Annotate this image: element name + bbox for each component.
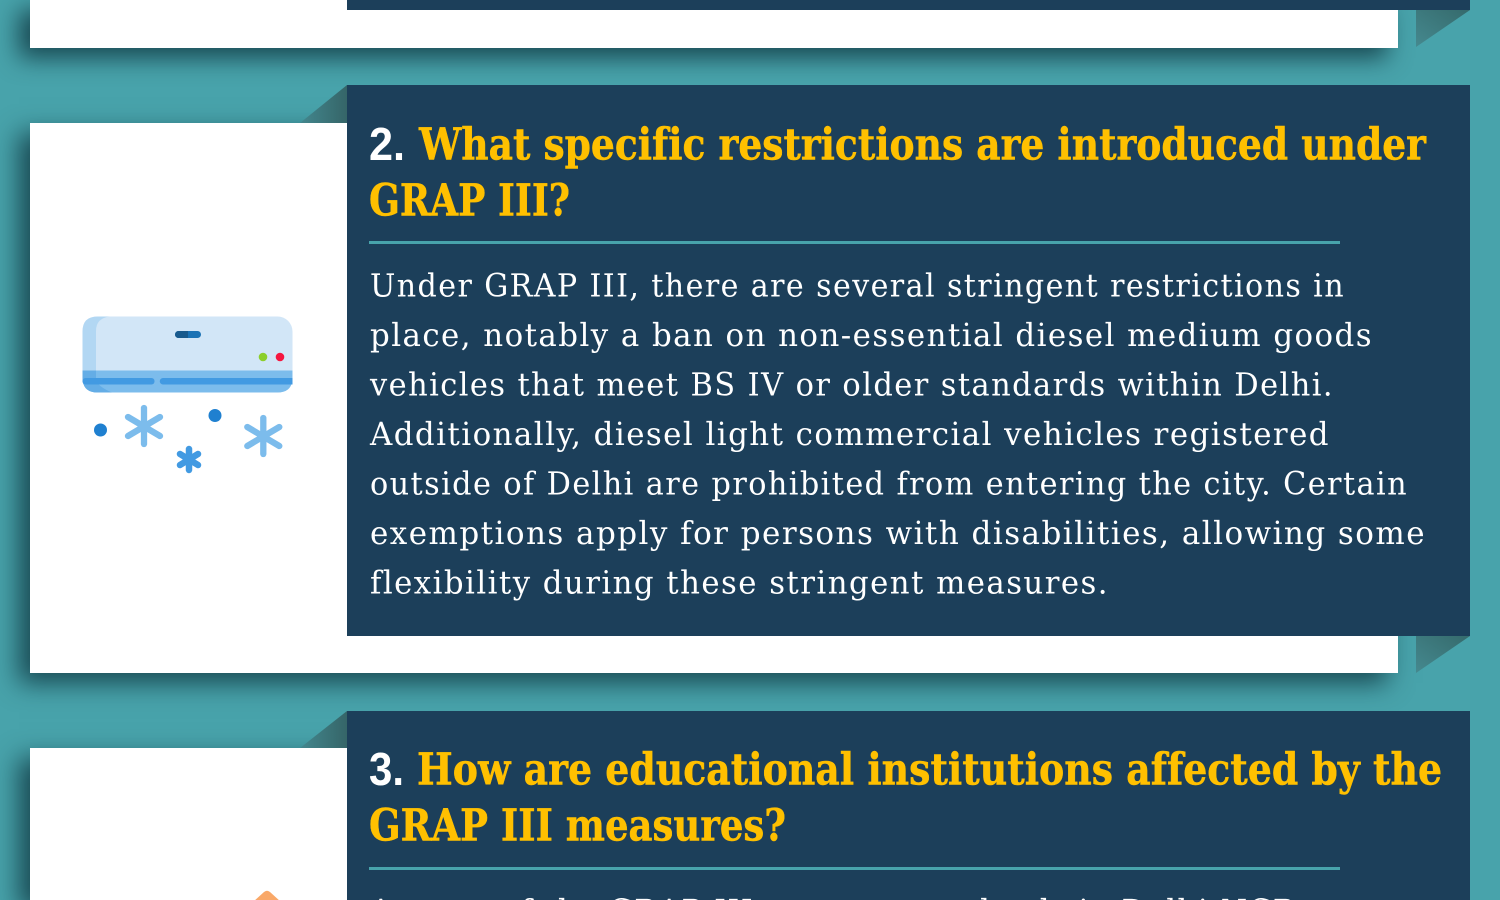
- icon: school roof tip: [255, 890, 279, 900]
- snowflake right: [247, 418, 279, 454]
- question number: 3.: [369, 743, 404, 795]
- text block: answer 2: Additionally, diesel light commercial vehicles registered: [369, 415, 1330, 453]
- white card base: [30, 748, 1398, 900]
- text block: answer 2: [369, 266, 1426, 602]
- white card base: [30, 123, 1398, 673]
- left folded corner: [300, 711, 347, 748]
- right folded corner: [1416, 10, 1470, 47]
- navy answer panel: [347, 711, 1470, 900]
- text block: answer 2: flexibility during these stringent measures.: [370, 564, 1109, 602]
- panel: question 1 card (cropped): [3, 0, 1470, 74]
- text block: answer 2: place, notably a ban on non-essential diesel medium goods: [370, 316, 1373, 354]
- panel: question 2 card: [2, 85, 1470, 700]
- question number: 2.: [369, 118, 405, 170]
- heading: question 3: [369, 743, 1442, 852]
- snow dots: [94, 409, 222, 436]
- text block: answer 2: Under GRAP III, there are several stringent restrictions in: [370, 266, 1345, 304]
- text block: answer 2: vehicles that meet BS IV or older standards within Delhi.: [369, 366, 1334, 404]
- AC unit body: [82, 316, 292, 392]
- divider: question 3: [369, 867, 1340, 870]
- question text line 2: GRAP III measures?: [369, 800, 786, 852]
- question text line 2: GRAP III?: [369, 176, 570, 226]
- navy answer panel: [347, 85, 1470, 636]
- text block: answer 2: exemptions apply for persons with disabilities, allowing some: [370, 514, 1426, 552]
- right folded corner: [1416, 636, 1470, 673]
- heading: question 2: [369, 118, 1427, 226]
- snowflake bottom: [180, 449, 198, 470]
- navy answer panel: [347, 0, 1470, 10]
- divider: question 2: [369, 241, 1340, 244]
- snowflake left: [128, 408, 160, 444]
- icon: air conditioner with snowflakes: [82, 316, 292, 474]
- left folded corner: [300, 85, 347, 123]
- panel: question 3 card: [2, 711, 1470, 900]
- text block: answer 2: outside of Delhi are prohibited from entering the city. Certain: [370, 464, 1408, 502]
- white card base: [30, 0, 1398, 48]
